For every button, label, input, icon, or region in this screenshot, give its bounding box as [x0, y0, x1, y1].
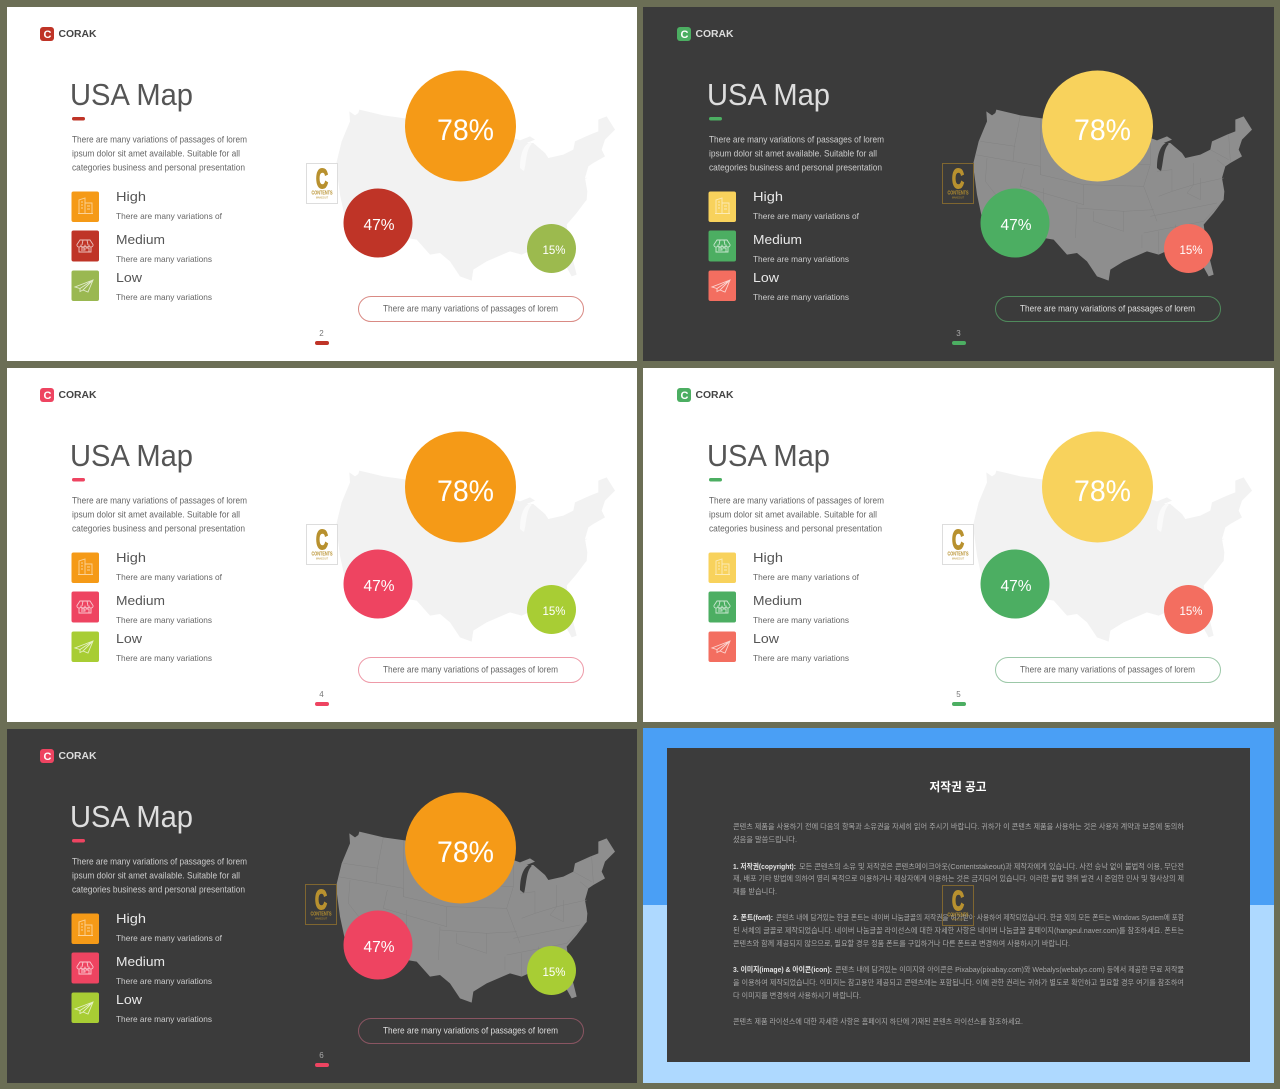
logo: C [44, 751, 52, 763]
panel: slide 3 dark yellow [643, 7, 1274, 361]
notice: font [733, 912, 1184, 948]
notice: image and icon: 다 이미지를 변경하여 사용하시기 바랍니다. [733, 990, 861, 1000]
circle 47% [344, 550, 412, 618]
logo: CORAK [58, 389, 97, 401]
logo [40, 749, 97, 763]
legend: high [72, 911, 223, 944]
notice: font: 된 서체의 글꼴로 제작되었습니다. 네이버 나눔글꼴 라이선스에 대한 자세한 사항은 네이버 나눔글꼴 홈페이지(hangeul.naver.com)를 참조하세요. 폰트는 [733, 925, 1184, 935]
legend: low: Low [116, 631, 143, 646]
circle 78%: 78% [1074, 475, 1131, 508]
description: ipsum dolor sit amet available. Suitable for all [709, 148, 877, 158]
callout pill [358, 1018, 584, 1044]
logo: CORAK [58, 28, 97, 40]
legend: high: High [116, 911, 146, 926]
title: USA Map [70, 438, 193, 473]
title: USA Map [70, 799, 193, 834]
description: There are many variations of passages of lorem [72, 134, 247, 144]
legend: medium: There are many variations [753, 254, 849, 264]
description [72, 134, 247, 172]
description: ipsum dolor sit amet available. Suitable for all [72, 148, 240, 158]
legend: high [708, 189, 860, 222]
legend: high: There are many variations of [116, 933, 223, 943]
legend: medium [72, 952, 212, 986]
description: ipsum dolor sit amet available. Suitable for all [72, 510, 240, 520]
circle 47% [980, 550, 1050, 618]
legend: medium: There are many variations [116, 254, 212, 264]
logo [677, 388, 734, 402]
panel: slide 2 white red [7, 7, 637, 361]
badge: MAKEOUT [952, 558, 965, 560]
badge [942, 524, 974, 564]
legend: low: Low [116, 270, 143, 285]
badge: CONTENTS [310, 912, 332, 918]
description: There are many variations of passages of lorem [709, 134, 884, 144]
circle 15% [527, 585, 576, 634]
notice: copyright: 모든 콘텐츠의 소유 및 저작권은 콘텐츠메이크아웃(Contentstakeout)과 제작자에게 있습니다. 사전 승낙 없이 불법적 이용, 무단전 [799, 861, 1184, 871]
callout pill: There are many variations of passages of lorem [383, 304, 558, 314]
badge [306, 524, 338, 564]
page number [952, 690, 966, 706]
legend: low [72, 631, 212, 663]
circle 78% [1042, 432, 1153, 542]
badge [306, 884, 336, 924]
circle 47% [344, 188, 412, 258]
title underline [72, 839, 85, 842]
notice: font: 2. 폰트(font): [733, 913, 773, 922]
circle 15% [1164, 585, 1213, 634]
logo: CORAK [696, 28, 734, 40]
callout pill [996, 296, 1220, 322]
circle 47% [980, 188, 1050, 258]
callout pill: There are many variations of passages of lorem [383, 664, 558, 674]
page number: 2 [319, 329, 324, 338]
callout pill: There are many variations of passages of lorem [383, 1026, 558, 1036]
page number [315, 1051, 329, 1067]
legend: low [708, 270, 849, 302]
panel: slide 6 dark pink [7, 729, 637, 1083]
badge [942, 885, 974, 926]
badge: CONTENTS [948, 190, 969, 196]
legend: medium: Medium [753, 593, 802, 608]
map [336, 110, 615, 281]
badge: CONTENTS [948, 552, 969, 558]
page number: 4 [319, 690, 324, 699]
description: categories business and personal presentation [72, 524, 245, 534]
panel: copyright notice [643, 728, 1274, 1083]
legend: low: There are many variations [753, 292, 849, 302]
badge [942, 163, 974, 204]
legend: low [72, 992, 212, 1024]
panel: slide 5 white green [643, 368, 1274, 722]
circle 47% [344, 910, 412, 980]
legend: high [72, 189, 223, 222]
callout pill [358, 658, 584, 682]
circle 78%: 78% [437, 836, 494, 869]
logo [40, 27, 97, 41]
legend: medium [72, 592, 212, 625]
badge: CONTENTS [312, 552, 333, 558]
title underline [709, 117, 722, 120]
legend: medium [708, 230, 849, 264]
badge: C [316, 163, 328, 194]
circle 78%: 78% [437, 475, 494, 508]
legend: low: Low [753, 631, 780, 646]
logo [677, 27, 734, 41]
legend: medium [72, 230, 212, 264]
notice: font: 콘텐츠 내에 담겨있는 한글 폰트는 네이버 나눔글꼴의 저작권을 허가받아 사용하여 제작되었습니다. 한글 외의 모든 폰트는 Windows System에 포함 [776, 912, 1184, 922]
legend: high: High [116, 189, 146, 204]
page number [952, 329, 966, 345]
circle 15% [527, 224, 576, 273]
notice: font: 콘텐츠와 함께 제공되지 않으므로, 필요할 경우 정품 폰트를 구입하거나 다른 폰트로 변경하여 사용하시기 바랍니다. [733, 938, 1070, 948]
legend: high: There are many variations of [116, 572, 223, 582]
circle 15%: 15% [1180, 243, 1203, 257]
title: USA Map [707, 438, 830, 473]
description: There are many variations of passages of lorem [709, 496, 884, 506]
circle 47%: 47% [364, 217, 395, 234]
circle 15%: 15% [542, 965, 566, 979]
legend: high [708, 550, 860, 583]
legend: medium: Medium [116, 954, 165, 969]
legend: high: High [753, 550, 783, 565]
circle 78% [405, 70, 516, 182]
legend: high: There are many variations of [753, 211, 860, 221]
notice title: 저작권 공고 [930, 779, 986, 794]
notice: copyright: 1. 저작권(copyright): [733, 861, 796, 871]
circle 47%: 47% [364, 939, 395, 956]
badge: MAKEOUT [952, 196, 965, 200]
legend: medium [708, 592, 849, 625]
legend: high [72, 550, 223, 583]
logo [40, 388, 97, 402]
badge: C [316, 524, 328, 555]
notice: copyright: 재, 배포 기타 방법에 의하여 영리 목적으로 이용하거나 제삼자에게 이용하는 것은 금지되어 있습니다. 이러한 불법 행위 발견 시 준엄한 민사 및 형사상의 제 [733, 873, 1184, 883]
logo: C [680, 390, 688, 402]
title underline [72, 117, 85, 120]
circle 15%: 15% [542, 604, 566, 618]
badge: MAKEOUT [315, 918, 328, 920]
notice: copyright [733, 861, 1184, 896]
circle 47%: 47% [364, 578, 395, 595]
badge: CONTENTS [312, 190, 333, 196]
description: categories business and personal presentation [72, 884, 245, 894]
description: categories business and personal presentation [709, 162, 882, 172]
badge: C [315, 884, 327, 915]
description: ipsum dolor sit amet available. Suitable for all [709, 510, 877, 520]
legend: high: High [116, 550, 146, 565]
page number: 5 [956, 690, 961, 699]
notice: copyright: 재를 받습니다. [733, 886, 777, 896]
map [973, 110, 1252, 281]
page number [315, 329, 329, 345]
legend: low: Low [116, 992, 143, 1007]
logo: C [44, 29, 52, 41]
title underline [709, 478, 722, 482]
badge [306, 163, 338, 204]
legend: medium: Medium [116, 232, 165, 247]
circle 78% [405, 432, 516, 542]
legend: low [72, 270, 212, 302]
logo: CORAK [58, 750, 97, 762]
legend: low: There are many variations [116, 292, 212, 302]
logo: C [680, 29, 688, 41]
circle 78%: 78% [437, 114, 494, 147]
circle 47%: 47% [1000, 217, 1032, 234]
description [709, 134, 884, 172]
logo: C [44, 390, 52, 402]
description: There are many variations of passages of lorem [72, 856, 247, 866]
circle 15%: 15% [1180, 604, 1203, 618]
notice intro: 셨음을 말씀드립니다. [733, 835, 797, 844]
badge: MAKEOUT [316, 196, 329, 200]
map [973, 471, 1252, 642]
legend: medium: Medium [753, 232, 802, 247]
legend: high: High [753, 189, 783, 204]
circle 78% [405, 792, 516, 904]
legend: low: Low [753, 270, 780, 285]
notice footer: 콘텐츠 제품 라이선스에 대한 자세한 사항은 홈페이지 하단에 기재된 콘텐츠 라이선스를 참조하세요. [733, 1016, 1023, 1026]
legend: high: There are many variations of [753, 572, 860, 582]
notice: image and icon: 을 이용하여 제작되었습니다. 이미지는 참고용만 제공되고 콘텐츠에는 포함됩니다. 이에 관한 권리는 귀하가 별도로 확인하고 필요할 경우 여기를 참조하여 [733, 977, 1184, 987]
circle 15% [527, 946, 576, 995]
circle 78% [1042, 70, 1153, 182]
callout pill: There are many variations of passages of lorem [1020, 664, 1195, 674]
legend: medium: Medium [116, 593, 165, 608]
legend: low: There are many variations [116, 653, 212, 663]
circle 15% [1164, 224, 1213, 273]
description: categories business and personal presentation [72, 162, 245, 172]
logo: CORAK [696, 389, 734, 401]
description: ipsum dolor sit amet available. Suitable for all [72, 870, 240, 880]
page number [315, 690, 329, 706]
legend: medium: There are many variations [753, 615, 849, 625]
map [336, 471, 615, 642]
title: USA Map [70, 77, 193, 112]
title: USA Map [707, 77, 830, 112]
description: categories business and personal presentation [709, 524, 882, 534]
legend: medium: There are many variations [116, 615, 212, 625]
callout pill [996, 658, 1220, 682]
title underline [72, 478, 85, 482]
notice intro [733, 821, 1184, 844]
notice: image and icon: 콘텐츠 내에 담겨있는 이미지와 아이콘은 Pixabay(pixabay.com)와 Webalys(webalys.com) 등에서 제공한 무료 저작물 [835, 964, 1184, 974]
page number: 6 [319, 1051, 324, 1060]
badge: MAKEOUT [952, 918, 965, 922]
badge: CONTENTS [948, 912, 969, 918]
badge: C [952, 885, 964, 916]
notice: image and icon: 3. 이미지(image) & 아이콘(icon): [733, 964, 832, 974]
badge: C [952, 524, 964, 555]
description: There are many variations of passages of lorem [72, 496, 247, 506]
page number: 3 [956, 329, 961, 338]
legend: low [708, 631, 849, 663]
legend: medium: There are many variations [116, 976, 212, 986]
circle 15%: 15% [542, 243, 566, 257]
circle 78%: 78% [1074, 114, 1131, 147]
callout pill: There are many variations of passages of lorem [1020, 304, 1195, 314]
circle 47%: 47% [1000, 578, 1032, 595]
badge: C [952, 163, 964, 194]
notice intro: 콘텐츠 제품을 사용하기 전에 다음의 항목과 소유권을 자세히 읽어 주시기 바랍니다. 귀하가 이 콘텐츠 제품을 사용하는 것은 사용자 계약과 보증에 동의하 [733, 821, 1184, 831]
description [72, 496, 247, 534]
map [336, 832, 615, 1003]
legend: high: There are many variations of [116, 211, 223, 221]
panel: slide 4 white pink [7, 368, 637, 722]
notice: image and icon [733, 964, 1184, 1000]
legend: low: There are many variations [753, 653, 849, 663]
legend: low: There are many variations [116, 1014, 212, 1024]
description [709, 496, 884, 534]
callout pill [358, 296, 584, 322]
description [72, 856, 247, 894]
badge: MAKEOUT [316, 558, 329, 560]
